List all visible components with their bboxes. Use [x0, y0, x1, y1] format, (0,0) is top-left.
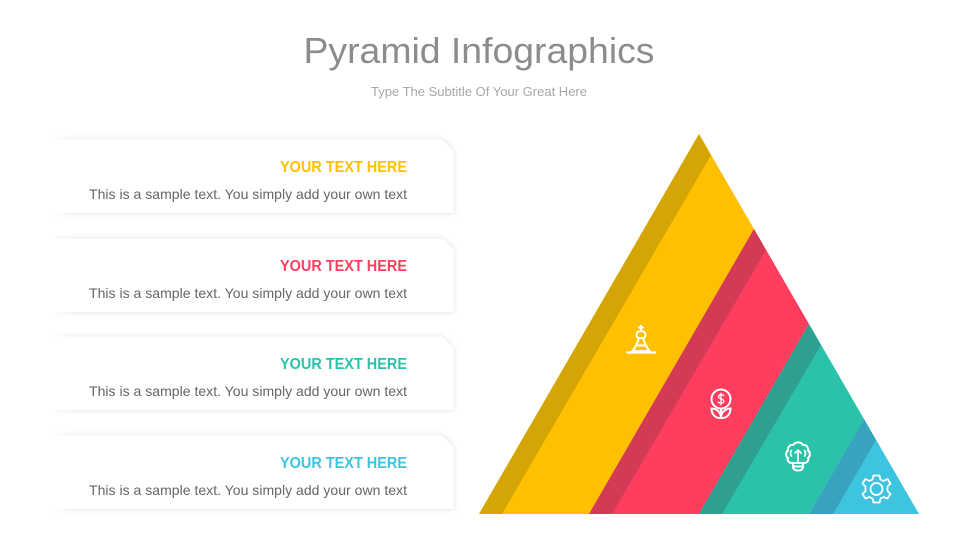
- panel: card 1: [30, 130, 454, 222]
- pyramid chart: [479, 134, 919, 514]
- yellow layer: [479, 134, 754, 514]
- title: Pyramid Infographics: [304, 30, 654, 71]
- panel: card 2: [30, 229, 454, 321]
- panel: card 4: [30, 426, 454, 518]
- teal layer: [699, 324, 864, 514]
- card 2 text: This is a sample text. You simply add your own text: [89, 285, 407, 301]
- card 3 text: This is a sample text. You simply add your own text: [89, 383, 407, 399]
- red layer: [589, 229, 809, 514]
- card 2 heading: YOUR TEXT HERE: [280, 258, 407, 275]
- icon: money flower: [712, 390, 730, 418]
- icon: chess piece: [626, 325, 656, 352]
- icon: brain bulb: [786, 442, 810, 470]
- subtitle: Type The Subtitle Of Your Great Here: [371, 84, 587, 99]
- card 1 text: This is a sample text. You simply add your own text: [89, 186, 407, 202]
- card 1 heading: YOUR TEXT HERE: [280, 159, 407, 176]
- panel: card 3: [30, 327, 454, 419]
- card 3 heading: YOUR TEXT HERE: [280, 356, 407, 373]
- blue layer: [809, 419, 919, 514]
- card 4 heading: YOUR TEXT HERE: [280, 455, 407, 472]
- card 4 text: This is a sample text. You simply add your own text: [89, 482, 407, 498]
- icon: gear: [862, 476, 890, 502]
